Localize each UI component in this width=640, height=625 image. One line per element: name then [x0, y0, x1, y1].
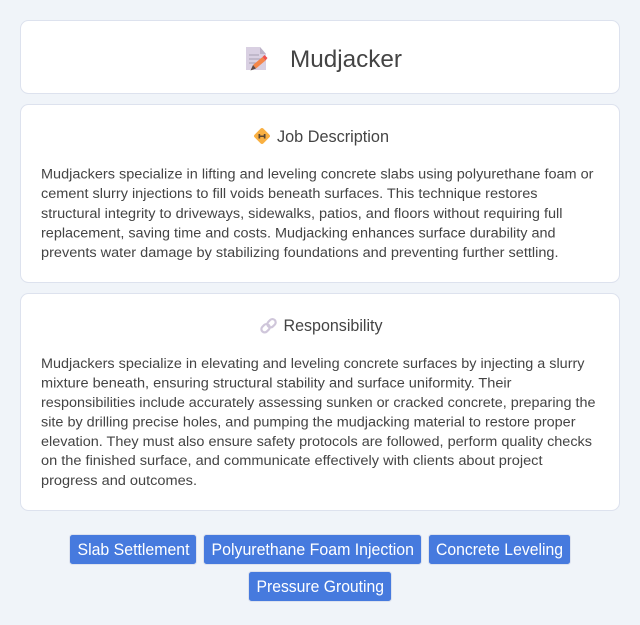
text block: responsibility: progress and outcomes.: [41, 473, 197, 489]
tag: Pressure Grouting: [248, 572, 392, 602]
text block: job description: prevents water damage by stabilizing foundations and preventing further settling.: [41, 245, 558, 261]
tag: Concrete Leveling: Concrete Leveling: [436, 541, 563, 559]
icon: chain link: [260, 318, 277, 334]
text block: job description: Mudjackers specialize in lifting and leveling concrete slabs using polyurethane foam or: [41, 166, 594, 182]
tag: Slab Settlement: [70, 534, 196, 564]
text block: responsibility: Mudjackers specialize in elevating and leveling concrete surfaces by injecting a slurry: [41, 356, 585, 372]
text block: responsibility: [41, 356, 596, 489]
text block: job description: replacement, saving time and costs. Mudjacking enhances surface durability and: [41, 226, 556, 242]
icon: construction diamond: [253, 127, 271, 145]
text block: job description: cement slurry injections to fill voids beneath surfaces. This technique restores: [41, 186, 538, 202]
tag: Polyurethane Foam Injection: [204, 534, 422, 564]
text block: job description: structural integrity to driveways, sidewalks, patios, and floors without requiring full: [41, 206, 562, 222]
tag: Concrete Leveling: [428, 534, 570, 564]
heading: Responsibility: Responsibility: [284, 317, 383, 335]
text block: responsibility: on the finished surface, and communicate effectively with clients about project: [41, 453, 543, 469]
heading: Mudjacker: Mudjacker: [290, 46, 402, 73]
text block: responsibility: elevation. They must also ensure safety protocols are followed, perform quality checks: [41, 434, 592, 450]
panel: title: [20, 20, 620, 94]
tag: Pressure Grouting: Pressure Grouting: [256, 578, 384, 596]
text block: job description: [41, 166, 594, 261]
icon: document with pencil: [246, 47, 268, 70]
text block: responsibility: responsibilities include accurately assessing sunken or cracked concrete, preparing the: [41, 395, 596, 411]
text block: responsibility: mixture beneath, ensuring structural stability and surface uniformity. Their: [41, 376, 512, 392]
panel: responsibility: [20, 294, 620, 510]
text block: responsibility: site by drilling precise holes, and pumping the mudjacking material to restore proper: [41, 414, 576, 430]
tag: Slab Settlement: Slab Settlement: [78, 541, 190, 559]
tag: Polyurethane Foam Injection: Polyurethane Foam Injection: [212, 541, 414, 559]
panel: job description: [20, 104, 620, 282]
heading: Job Description: Job Description: [277, 128, 389, 146]
